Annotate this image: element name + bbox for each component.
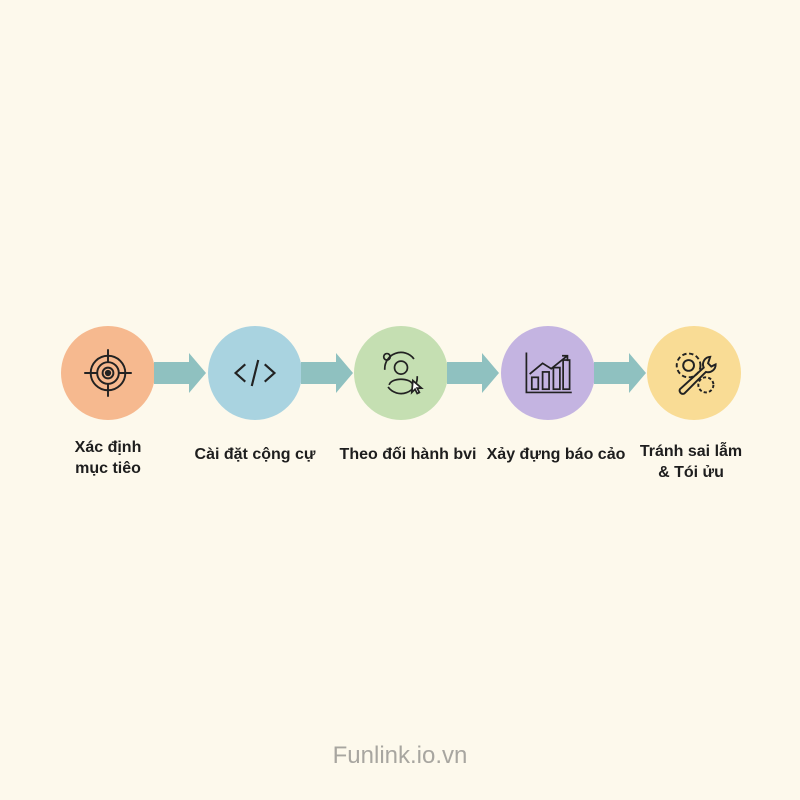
label 5	[640, 442, 742, 481]
step 5 circle: gears	[647, 326, 741, 420]
step 1 circle: target	[61, 326, 155, 420]
step 4 circle: chart	[501, 326, 595, 420]
label 1	[74, 439, 141, 477]
footer: Funlink.io.vn	[333, 742, 467, 769]
step 2 circle: code	[208, 326, 302, 420]
label 1: mục tiêo	[75, 460, 141, 477]
label 1: Xác định	[75, 439, 141, 456]
label 2: Cài đặt cộng cự	[195, 446, 315, 463]
label 5: & Tói ửu	[658, 464, 724, 481]
arrow 3	[447, 353, 499, 393]
label 3: Theo đối hành bvi	[340, 446, 476, 463]
arrow 2	[301, 353, 353, 393]
arrow 4	[594, 353, 646, 393]
arrow 1	[154, 353, 206, 393]
label 4: Xảy đựng báo cảo	[487, 446, 625, 463]
label 5: Tránh sai lẫm	[640, 443, 742, 460]
step 3 circle: user tracking	[354, 326, 448, 420]
